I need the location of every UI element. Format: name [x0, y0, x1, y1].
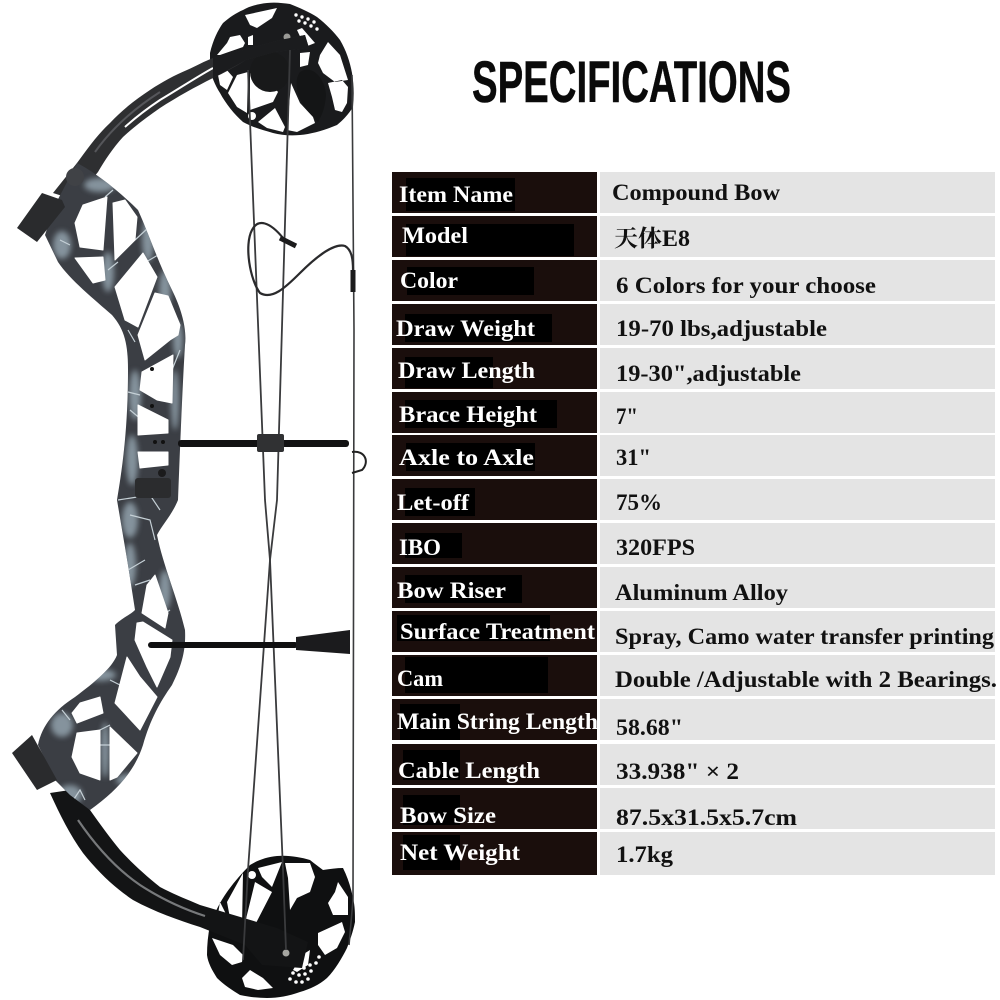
arrow rest cone [296, 630, 350, 654]
row values: Double /Adjustable with 2 Bearings. [615, 667, 997, 692]
row values: Compound Bow [612, 180, 780, 205]
row values: 1.7kg [616, 842, 674, 867]
title: SPECIFICATIONS [472, 50, 791, 115]
row values: 87.5x31.5x5.7cm [616, 805, 797, 830]
top limb [53, 34, 309, 200]
bottom cam wheel [207, 856, 355, 998]
row values: 19-70 lbs,adjustable [616, 316, 827, 341]
row values: 6 Colors for your choose [616, 273, 876, 298]
bottom limb [50, 790, 308, 968]
lower arrow rod [148, 642, 298, 648]
row labels: Main String Length [397, 709, 598, 734]
row labels: Axle to Axle [399, 445, 534, 470]
row labels: Surface Treatment [400, 619, 595, 644]
row labels: Color [400, 268, 458, 293]
row values [612, 180, 997, 867]
row values: 320FPS [616, 535, 695, 560]
top cam wheel [210, 3, 354, 135]
row labels [396, 182, 598, 865]
row values: 58.68" [616, 715, 683, 740]
row values: 19-30",adjustable [616, 361, 801, 386]
rod dampener [257, 434, 284, 452]
row labels: IBO [399, 535, 441, 560]
compound bow illustration [12, 3, 366, 998]
row values: 33.938" × 2 [616, 759, 739, 784]
row labels: Net Weight [400, 840, 520, 865]
black text patches [397, 178, 574, 870]
row values: Aluminum Alloy [615, 580, 789, 605]
top limb bolt [66, 168, 84, 186]
row values: 天体E8 [614, 226, 690, 251]
row labels: Bow Riser [397, 578, 506, 603]
row labels: Draw Weight [396, 316, 535, 341]
right column cells [600, 172, 995, 875]
row values: 75% [616, 490, 662, 515]
top limb pocket [17, 193, 65, 242]
string nock loop [352, 452, 366, 473]
left column cells [392, 172, 597, 875]
row labels: Bow Size [400, 803, 496, 828]
row labels: Cam [397, 666, 443, 691]
upper stabilizer rod [178, 440, 349, 447]
specification table [392, 172, 997, 875]
strings and cables [243, 50, 354, 960]
string loop [248, 223, 353, 295]
row labels: Model [402, 223, 468, 248]
row values: 31" [616, 445, 651, 470]
row values: Spray, Camo water transfer printing [615, 624, 995, 649]
row labels: Item Name [399, 182, 513, 207]
row labels: Draw Length [398, 358, 535, 383]
loop knot [280, 238, 353, 292]
riser [38, 163, 185, 810]
row values: 7" [616, 404, 638, 429]
bottom limb pocket [12, 735, 57, 790]
row labels: Cable Length [398, 758, 540, 783]
row labels: Brace Height [399, 402, 537, 427]
row labels: Let-off [397, 490, 469, 515]
